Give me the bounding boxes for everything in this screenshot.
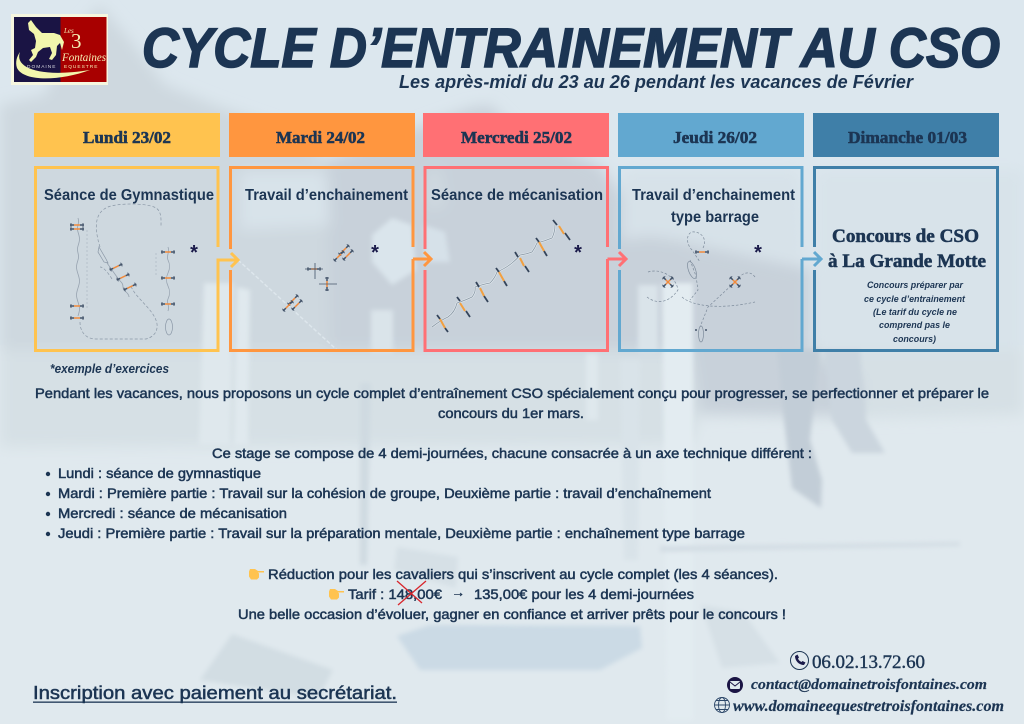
icon: small arrow — [454, 593, 462, 596]
panel heading: Travail d’enchainement — [632, 187, 796, 204]
diagram: gymnastic exercise — [70, 204, 175, 339]
panel note: (Le tarif du cycle ne — [873, 307, 957, 317]
upper scene and tree band — [0, 345, 1024, 447]
text block: introduction — [35, 385, 989, 421]
arrow: Mardi to Mercredi — [413, 252, 431, 266]
panel: Séance de mécanisation — [425, 168, 608, 350]
text: price: Tarif : 148,00€ — [348, 586, 442, 602]
asterisk: * — [754, 242, 762, 264]
panel: Travail d'enchainement — [230, 168, 413, 350]
text block: introduction: Pendant les vacances, nous proposons un cycle complet d’entraînement CSO spécialement conçu pour progresser, se perfectionner et préparer le — [35, 385, 989, 401]
arrow: Lundi to Mardi — [218, 253, 238, 267]
panel note: comprend pas le — [879, 320, 950, 330]
logo swoosh — [16, 52, 90, 78]
panel note: ce cycle d’entrainement — [864, 294, 966, 304]
bullet list: Mardi : Première partie : Travail sur la cohésion de groupe, Deuxième partie : travail d’enchaînement — [58, 485, 711, 501]
day header: Jeudi — [618, 113, 804, 157]
day header: Lundi — [34, 113, 220, 157]
bullet list: Lundi : séance de gymnastique — [58, 465, 261, 481]
arrow: Jeudi to Dimanche — [802, 252, 821, 266]
asterisk: * — [371, 242, 379, 264]
logo wordmark: Fontaines — [61, 50, 106, 64]
panel heading: Concours de CSO — [832, 226, 979, 247]
panel: Séance de Gymnastique — [36, 168, 218, 350]
text: website: www.domaineequestretroisfontaines.com — [733, 698, 1004, 715]
logo wordmark: 3 — [71, 29, 82, 53]
logo wordmark — [27, 27, 106, 70]
logo — [11, 14, 108, 85]
panel heading: Séance de Gymnastique — [44, 187, 214, 204]
jump posts — [199, 283, 233, 445]
icon: horse silhouette — [28, 20, 64, 62]
panel: Travail d'enchainement type barrage: type barrage — [671, 209, 759, 226]
bullet list: Jeudi : Première partie : Travail sur la préparation mentale, Deuxième partie : enchaînement type barrage — [58, 525, 745, 541]
day header: Jeudi: Jeudi 26/02 — [673, 128, 757, 147]
panel: Travail d'enchainement type barrage — [620, 168, 802, 350]
day header: Mardi: Mardi 24/02 — [276, 128, 365, 147]
icon: red strike-through — [397, 581, 426, 605]
text: closing line: Une belle occasion d’évoluer, gagner en confiance et arriver prêts pour le concours ! — [238, 606, 786, 622]
text block: programme: Ce stage se compose de 4 demi-journées, chacune consacrée à un axe technique différent : — [212, 445, 812, 461]
panel heading: Travail d’enchainement — [245, 187, 409, 204]
day header: Mercredi: Mercredi 25/02 — [461, 128, 572, 147]
diagram: jump-off course — [647, 232, 755, 342]
subtitle: Les après-midi du 23 au 26 pendant les vacances de Février — [399, 71, 915, 92]
diagram: cavaletti line — [432, 220, 570, 332]
bullet list — [46, 465, 745, 541]
day header: Mardi — [229, 113, 415, 157]
arrow: Mercredi to Jeudi — [608, 252, 626, 266]
registration note: Inscription avec paiement au secrétariat. — [33, 683, 397, 703]
icon: pointing hand — [249, 569, 264, 580]
panel note — [864, 280, 966, 344]
light diagonal pole — [238, 260, 337, 350]
panel: Concours de CSO: à La Grande Motte — [828, 251, 986, 272]
logo wordmark: EQUESTRE — [64, 64, 98, 70]
icon: envelope — [727, 677, 743, 693]
logo wordmark: DOMAINE — [27, 64, 56, 70]
icon: pointing hand — [329, 589, 344, 600]
horse legs — [777, 350, 822, 508]
text: reduction: Réduction pour les cavaliers qui s’inscrivent au cycle complet (les 4 séances). — [268, 566, 778, 582]
panel heading: Séance de mécanisation — [431, 187, 603, 204]
day header: Dimanche: Dimanche 01/03 — [848, 128, 967, 147]
panel note: Concours préparer par — [867, 280, 963, 290]
text block: programme — [46, 445, 812, 541]
icon: phone — [790, 652, 808, 670]
icon: globe — [714, 698, 730, 712]
ground details — [360, 383, 371, 565]
text block: introduction: concours du 1er mars. — [438, 405, 584, 421]
day header: Dimanche — [813, 113, 999, 157]
bullet list: Mercredi : séance de mécanisation — [58, 505, 287, 521]
diagram: jump sequence — [282, 244, 354, 312]
text: new price: 135,00€ pour les 4 demi-journées — [474, 586, 694, 602]
asterisk: * — [574, 242, 582, 264]
asterisk: * — [190, 242, 198, 264]
footnote: *exemple d’exercices — [50, 362, 169, 376]
panel: Concours de CSO — [814, 168, 998, 350]
panel note: concours) — [893, 334, 936, 344]
day header: Lundi: Lundi 23/02 — [83, 128, 171, 147]
rider jacket — [372, 218, 416, 285]
logo wordmark: Les — [63, 27, 74, 35]
day header: Mercredi — [423, 113, 609, 157]
text: email: contact@domainetroisfontaines.com — [751, 677, 987, 693]
text: phone number: 06.02.13.72.60 — [812, 652, 925, 673]
